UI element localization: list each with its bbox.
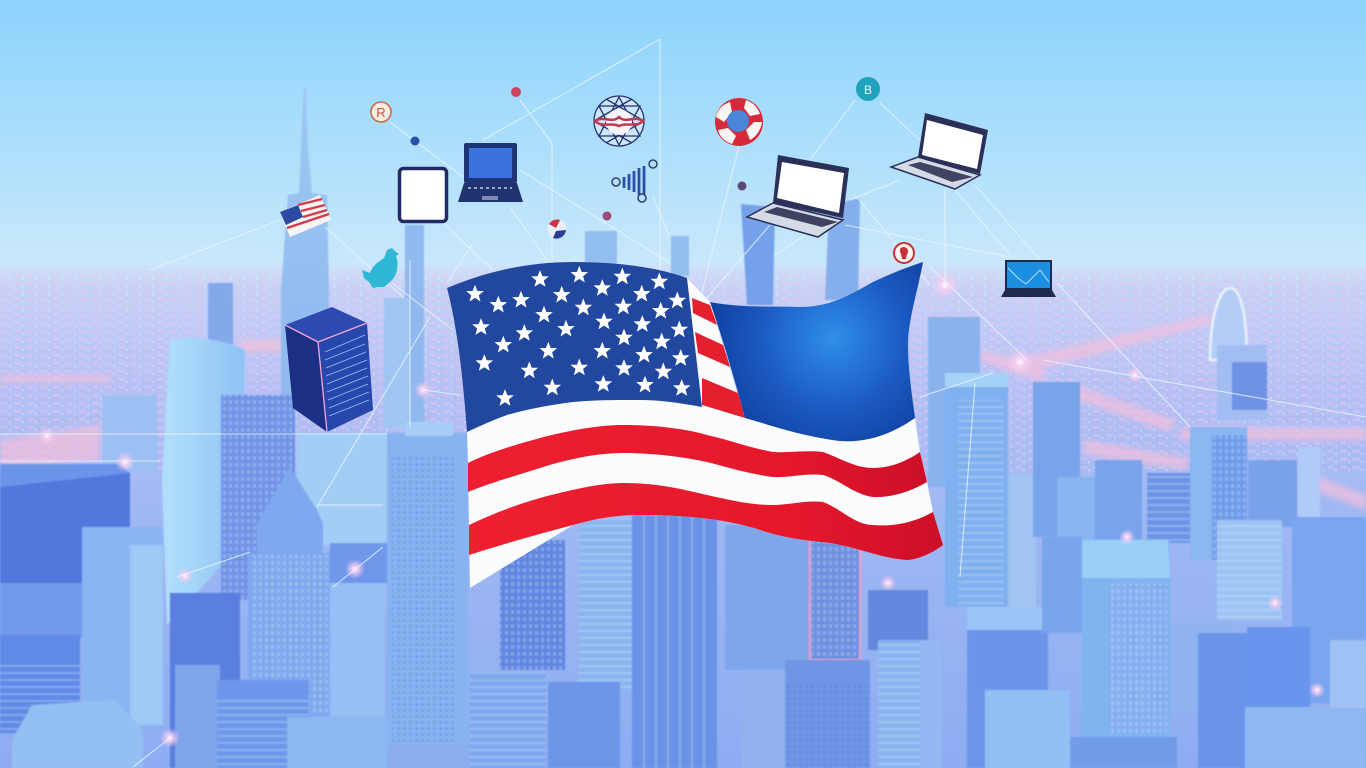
- flag: waving stars and stripes: [447, 262, 943, 588]
- icon: teal bird: [362, 248, 399, 288]
- flag: canton: [447, 262, 702, 432]
- icon: monitor laptop: [1001, 260, 1056, 297]
- icon: signal waves: [612, 160, 657, 202]
- icon: blue laptop: [458, 143, 523, 202]
- icon: teal info badge: [856, 77, 880, 101]
- background: city glow lights: [38, 271, 1325, 748]
- background: far towers: [103, 88, 1267, 487]
- background: sky: [0, 0, 1366, 270]
- icon: centre laptop: [747, 155, 849, 237]
- icon: teal info badge: B: [864, 83, 872, 97]
- icon: upper right laptop: [891, 113, 988, 189]
- flag: white cloth: [447, 262, 943, 588]
- icon: server rack: [285, 307, 373, 432]
- icon: registered badge: R: [376, 105, 386, 120]
- icon: wireframe globe: [594, 96, 644, 146]
- background: foreground towers: [0, 515, 1366, 768]
- flag: short red stripes: [692, 298, 745, 418]
- background: mid-ground towers: [0, 338, 1366, 748]
- icon: network nodes: [410, 87, 746, 220]
- icon: small US flag: [280, 195, 331, 237]
- icon: registered badge right: [894, 243, 914, 263]
- icon: small red-blue ball: [548, 220, 566, 239]
- flag: red stripes: [468, 425, 943, 560]
- icon: registered badge: [371, 102, 391, 122]
- flag: stars: [466, 266, 690, 406]
- background: distant city haze: [0, 265, 1366, 768]
- flag: blue panel: [710, 262, 923, 441]
- icon: red and white ball: [715, 98, 763, 146]
- icon: tablet: [400, 168, 446, 222]
